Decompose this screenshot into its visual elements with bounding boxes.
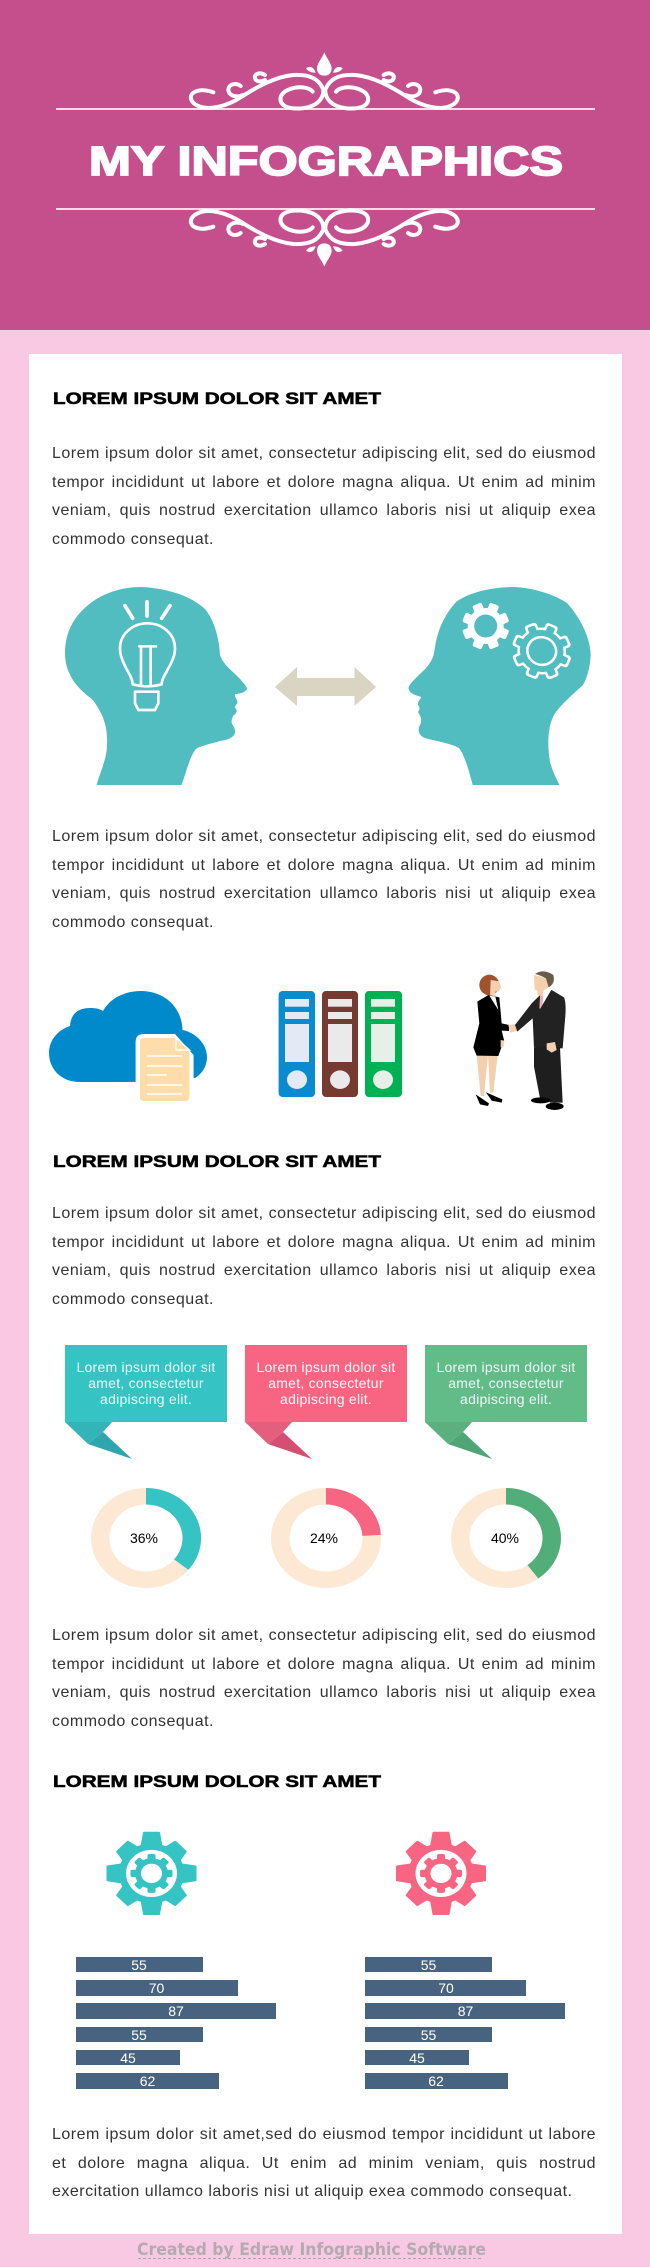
bar chart left: 45 — [120, 2050, 136, 2066]
callout: green: Lorem ipsum dolor sit — [436, 1359, 576, 1375]
header banner — [0, 0, 650, 330]
paragraph 3: veniam, quis nostrud exercitation ullamco laboris nisi ut aliquip exea — [52, 1262, 596, 1279]
paragraph 1: Lorem ipsum dolor sit amet, consectetur adipiscing elit, sed do eiusmod — [52, 445, 596, 462]
callout: pink: amet, consectetur — [268, 1375, 384, 1391]
icon: head with light bulb — [65, 587, 247, 785]
donut chart 24% — [271, 1488, 381, 1588]
callout: green — [425, 1345, 587, 1459]
heading 2: LOREM IPSUM DOLOR SIT AMET — [53, 1152, 382, 1171]
callout: pink — [245, 1345, 407, 1459]
donut chart 40%: 40% — [491, 1530, 519, 1546]
bar chart right: 87 — [458, 2003, 473, 2019]
bar chart left: 70 — [149, 1980, 164, 1996]
donut chart 36%: 36% — [130, 1530, 158, 1546]
ornament top — [191, 52, 458, 108]
paragraph 1 — [52, 445, 596, 548]
callout: teal: amet, consectetur — [88, 1375, 204, 1391]
icon: cloud with document — [49, 991, 207, 1105]
paragraph 2: commodo consequat. — [52, 914, 214, 931]
paragraph 4: tempor incididunt ut labore et dolore magna aliqua. Ut enim ad minim — [52, 1656, 596, 1673]
donut chart 40% — [451, 1488, 561, 1588]
donut chart 36% — [91, 1488, 201, 1588]
callout: green: amet, consectetur — [448, 1375, 564, 1391]
paragraph 3 — [52, 1205, 596, 1308]
bar chart left: 87 — [168, 2003, 184, 2019]
title: MY INFOGRAPHICS — [89, 138, 563, 184]
paragraph 4: Lorem ipsum dolor sit amet, consectetur adipiscing elit, sed do eiusmod — [52, 1627, 596, 1644]
icon: double arrow — [275, 667, 376, 706]
donut chart 24%: 24% — [310, 1530, 338, 1546]
paragraph 2: tempor incididunt ut labore et dolore magna aliqua. Ut enim ad minim — [52, 857, 596, 874]
paragraph 3: commodo consequat. — [52, 1291, 214, 1308]
paragraph 5: et dolore magna aliqua. Ut enim ad minim veniam, quis nostrud — [52, 2155, 596, 2172]
paragraph 4 — [52, 1627, 596, 1730]
bar chart left: 55 — [131, 2027, 147, 2043]
icon: binders — [279, 991, 402, 1097]
icon: business people shaking hands — [473, 971, 566, 1110]
bar chart right: 55 — [421, 1957, 436, 1973]
paragraph 2 — [52, 828, 596, 931]
paragraph 2: veniam, quis nostrud exercitation ullamco laboris nisi ut aliquip exea — [52, 885, 596, 902]
bar chart right: 55 — [421, 2027, 436, 2043]
paragraph 1: veniam, quis nostrud exercitation ullamco laboris nisi ut aliquip exea — [52, 502, 596, 519]
header rule top — [56, 108, 595, 110]
icon: head with gears — [408, 587, 591, 785]
bar chart right: 70 — [438, 1980, 454, 1996]
icon: teal gear — [108, 1833, 196, 1914]
bar chart left: 55 — [131, 1957, 147, 1973]
paragraph 5 — [52, 2126, 596, 2200]
paragraph 1: tempor incididunt ut labore et dolore magna aliqua. Ut enim ad minim — [52, 474, 596, 491]
callout: teal: Lorem ipsum dolor sit — [76, 1359, 216, 1375]
header rule bottom — [56, 208, 595, 210]
bar chart right — [365, 1957, 565, 2089]
bar chart right: 62 — [428, 2073, 444, 2089]
white content card — [29, 354, 622, 2234]
footer credit: Created by Edraw Infographic Software — [137, 2240, 486, 2260]
callout: pink: adipiscing elit. — [280, 1391, 372, 1407]
paragraph 4: veniam, quis nostrud exercitation ullamco laboris nisi ut aliquip exea — [52, 1684, 596, 1701]
bar chart right: 45 — [409, 2050, 425, 2066]
icon: pink gear — [397, 1833, 485, 1914]
callout: green: adipiscing elit. — [460, 1391, 552, 1407]
paragraph 4: commodo consequat. — [52, 1713, 214, 1730]
heading 1: LOREM IPSUM DOLOR SIT AMET — [53, 389, 382, 408]
bar chart left: 62 — [140, 2073, 155, 2089]
ornament bottom — [191, 211, 458, 267]
paragraph 2: Lorem ipsum dolor sit amet, consectetur adipiscing elit, sed do eiusmod — [52, 828, 596, 845]
paragraph 3: Lorem ipsum dolor sit amet, consectetur adipiscing elit, sed do eiusmod — [52, 1205, 596, 1222]
paragraph 3: tempor incididunt ut labore et dolore magna aliqua. Ut enim ad minim — [52, 1234, 596, 1251]
callout: pink: Lorem ipsum dolor sit — [256, 1359, 396, 1375]
paragraph 1: commodo consequat. — [52, 531, 214, 548]
paragraph 5: Lorem ipsum dolor sit amet,sed do eiusmod tempor incididunt ut labore — [52, 2126, 596, 2143]
callout: teal: adipiscing elit. — [100, 1391, 192, 1407]
heading 3: LOREM IPSUM DOLOR SIT AMET — [53, 1772, 382, 1791]
bar chart left — [76, 1957, 276, 2089]
callout: teal — [65, 1345, 227, 1459]
paragraph 5: exercitation ullamco laboris nisi ut aliquip exea commodo consequat. — [52, 2183, 572, 2200]
